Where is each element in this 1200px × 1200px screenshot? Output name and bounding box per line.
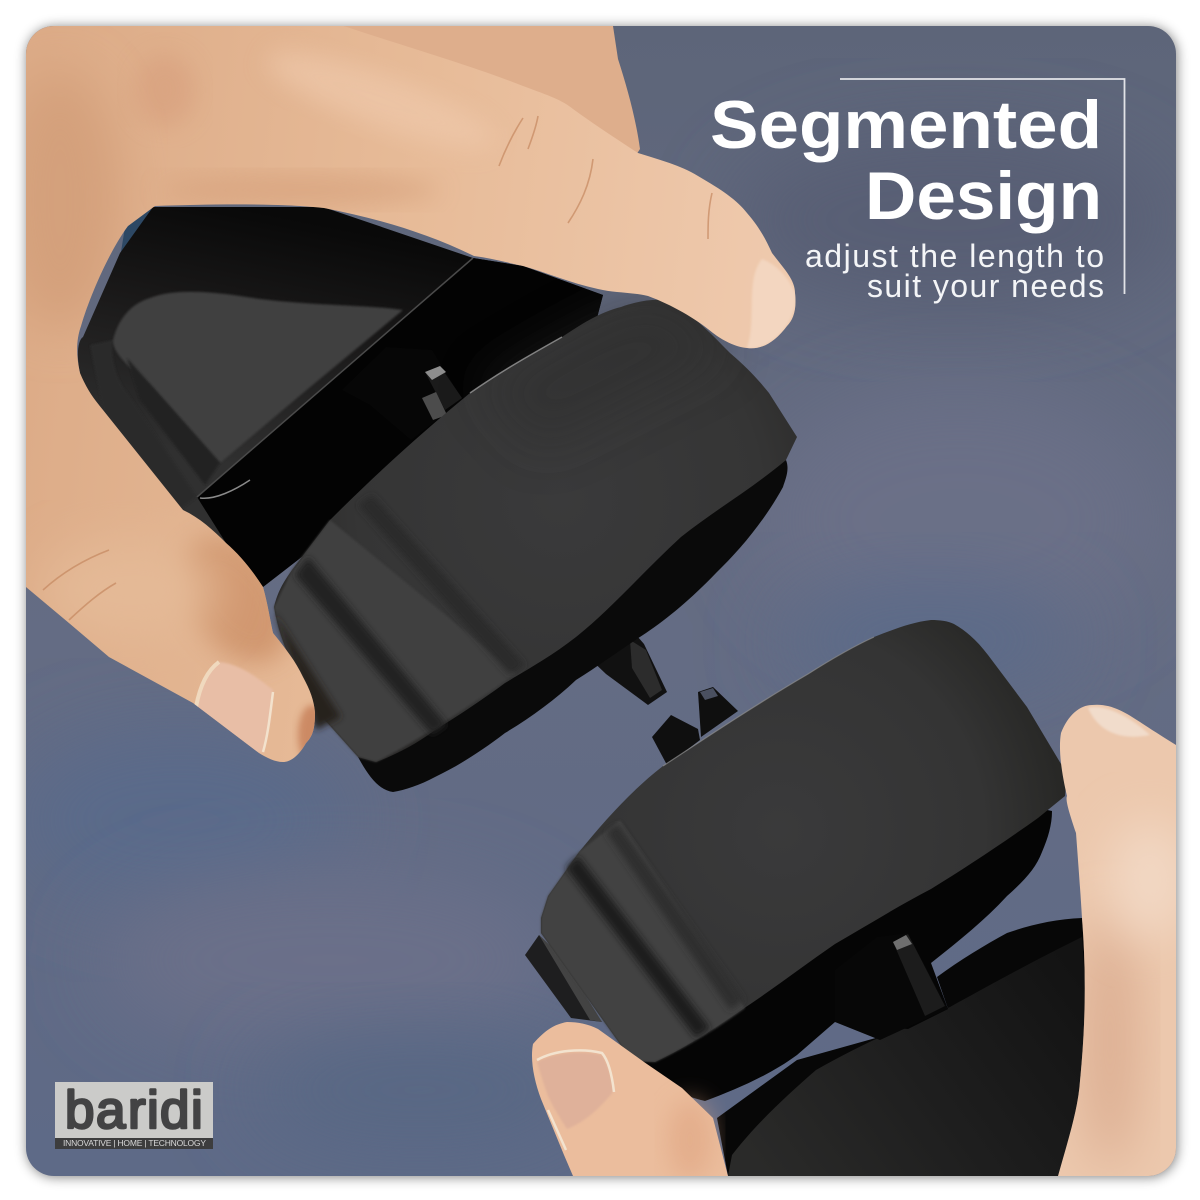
title: Segmented Design bbox=[710, 87, 1102, 234]
connector: clip on front segment bbox=[598, 638, 667, 705]
connector: clips on lower segment bbox=[652, 687, 738, 765]
logo wordmark: baridi bbox=[65, 1081, 203, 1140]
connector: hinge between lower clips bbox=[835, 933, 948, 1040]
hand: upper-left hand with index finger and thumb bbox=[0, 26, 796, 765]
segment: bottom clip bbox=[717, 918, 1090, 1176]
hand: lower-left fingertip bbox=[532, 1022, 728, 1180]
subtitle text: suit your needs bbox=[867, 268, 1104, 304]
segment: lower-right clip bbox=[525, 620, 1067, 1101]
hand: lower-right thumb bbox=[1058, 704, 1176, 1176]
segment: front upper clip bbox=[274, 300, 797, 792]
title: Segmented Design: Design bbox=[865, 158, 1102, 234]
logo tagline: INNOVATIVE | HOME | TECHNOLOGY bbox=[63, 1138, 206, 1148]
subtitle text bbox=[805, 238, 1104, 304]
segment: back upper-left clip bbox=[78, 207, 603, 587]
hand: back finger at top bbox=[344, 26, 640, 153]
connector: hinge between upper clips bbox=[422, 366, 462, 420]
title: Segmented Design: Segmented bbox=[710, 87, 1102, 163]
subtitle text: adjust the length to bbox=[805, 238, 1104, 274]
title frame lines bbox=[840, 79, 1124, 294]
logo: baridi badge bbox=[55, 1081, 213, 1149]
